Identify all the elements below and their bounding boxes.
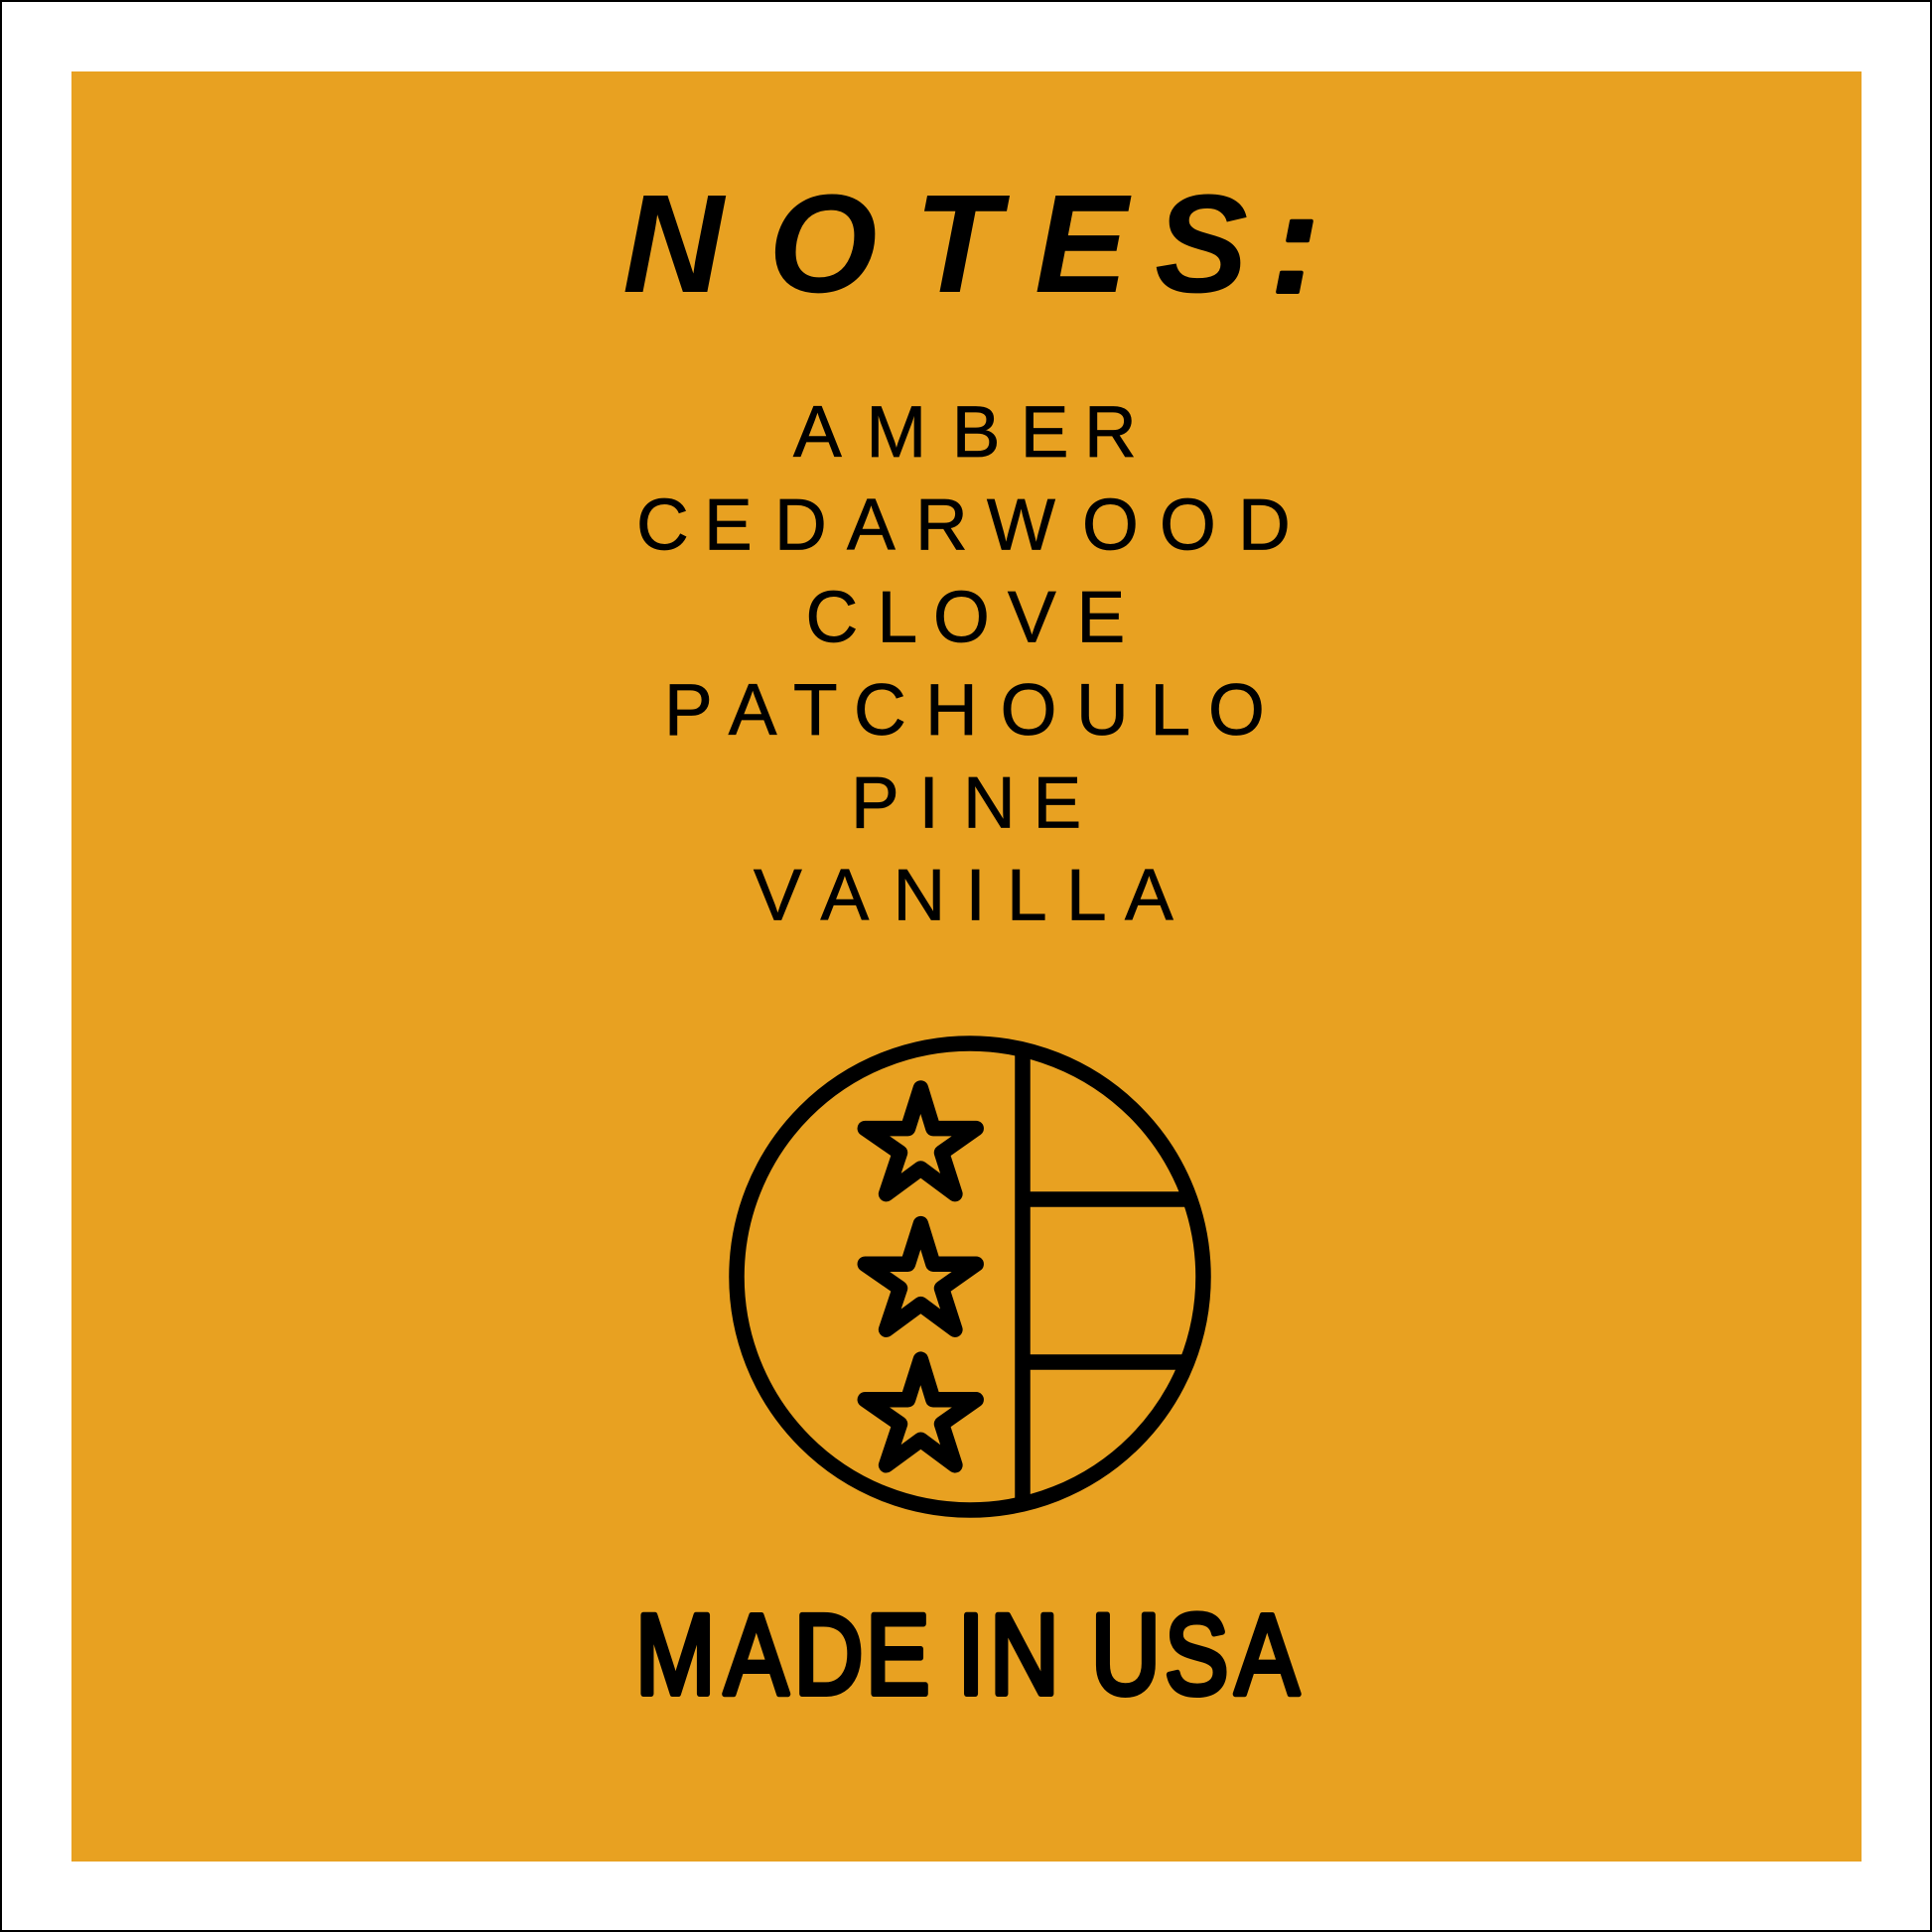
- flag stripes: [1023, 1050, 1189, 1503]
- note: amber: AMBER: [793, 392, 1137, 473]
- note: vanilla: VANILLA: [754, 856, 1173, 935]
- note: pine: PINE: [851, 762, 1081, 844]
- icon circle: [737, 1043, 1203, 1510]
- icon: American flag globe: [737, 1043, 1203, 1510]
- text block: notes list: [636, 392, 1291, 935]
- star 2: [865, 1224, 976, 1329]
- note: cedarwood: CEDARWOOD: [636, 484, 1291, 566]
- title: NOTES:: [622, 165, 1318, 322]
- note: clove: CLOVE: [806, 578, 1125, 658]
- note: patchoulo: PATCHOULO: [664, 670, 1265, 751]
- star 1: [865, 1088, 976, 1194]
- footer: made in USA: MADE IN USA: [635, 1590, 1300, 1719]
- star 3: [865, 1359, 976, 1465]
